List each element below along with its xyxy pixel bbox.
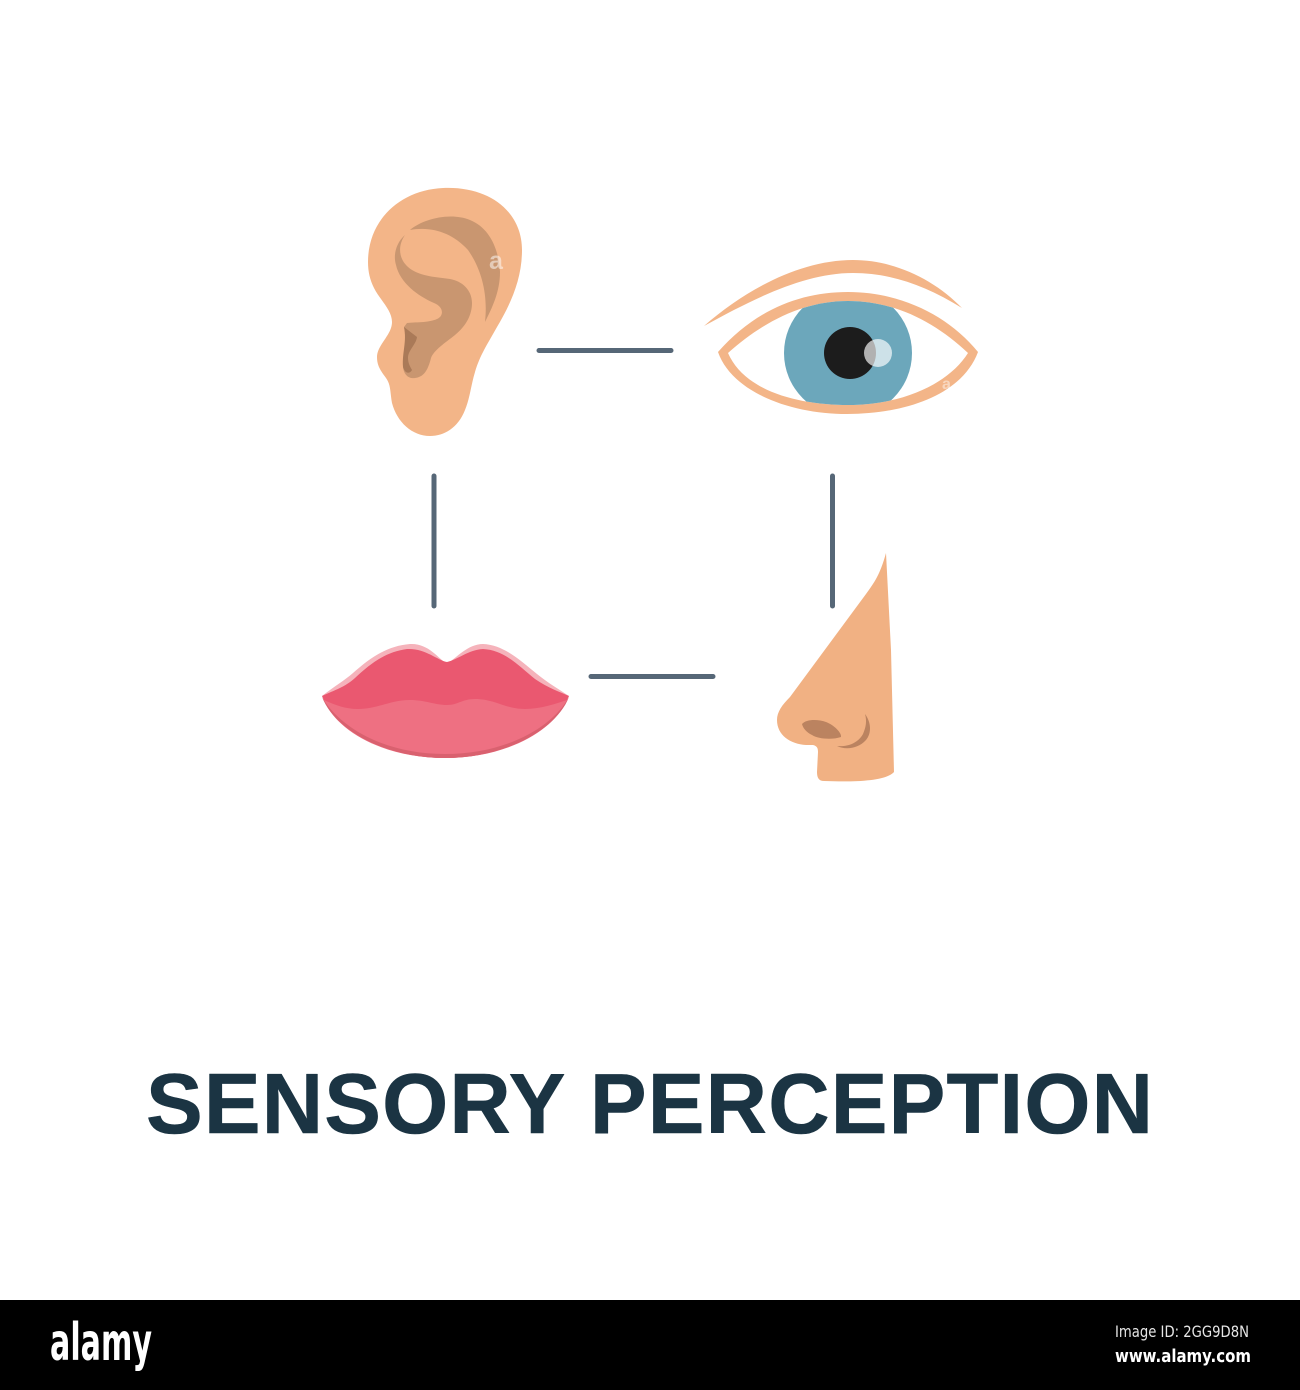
- icon: lips: [322, 644, 569, 758]
- connector: ear to lips: [432, 476, 436, 606]
- icon: ear: [368, 188, 522, 436]
- image id: Image ID: 2GG9D8N: [1115, 1322, 1249, 1341]
- footer logo: alamy: [50, 1313, 152, 1373]
- eyebrow: [704, 260, 962, 326]
- title: SENSORY PERCEPTION: [146, 1057, 1153, 1152]
- icon: eye: [704, 260, 978, 417]
- nostril wing: [837, 714, 870, 748]
- iris: [784, 301, 912, 405]
- connector: eye to nose: [830, 476, 835, 606]
- connector: ear to eye: [539, 348, 671, 353]
- nostril: [802, 720, 841, 739]
- watermark: ear: a: [489, 247, 504, 275]
- footer bar: [0, 1300, 1300, 1390]
- icon: nose: [777, 553, 894, 781]
- pupil: [824, 327, 876, 379]
- eyelid outline: [718, 292, 978, 414]
- connector: lips to nose: [591, 674, 713, 679]
- website: www.alamy.com: [1115, 1346, 1251, 1367]
- watermark: eye: a: [942, 376, 951, 393]
- highlight: [864, 339, 892, 367]
